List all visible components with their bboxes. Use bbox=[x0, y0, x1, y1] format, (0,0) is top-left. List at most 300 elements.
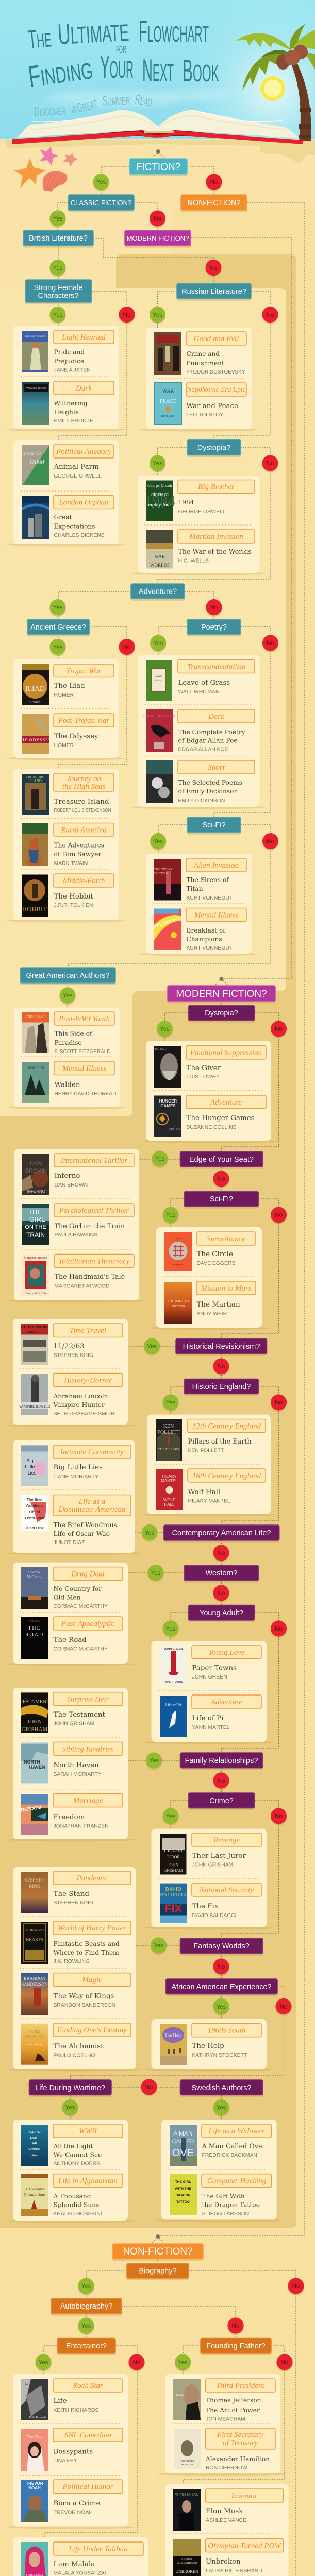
author: JOHN GREEN bbox=[192, 1674, 227, 1680]
tag bbox=[54, 664, 114, 677]
no: No bbox=[145, 2084, 153, 2091]
question: Crime?: Crime? bbox=[209, 1797, 234, 1805]
cover bbox=[22, 774, 49, 815]
cover: THE bbox=[28, 1625, 41, 1631]
tag: Young Love bbox=[209, 1649, 245, 1657]
no bbox=[141, 2079, 157, 2095]
title: War and Peace bbox=[187, 402, 238, 410]
arrow: modern sci-fi branches bbox=[171, 1199, 278, 1338]
title: FINDING bbox=[26, 52, 95, 94]
tag: Emotional Suppression bbox=[190, 1049, 262, 1057]
arrow: russian literature branches bbox=[158, 292, 270, 439]
arrow: dystopia branches bbox=[157, 447, 270, 584]
tag bbox=[53, 1742, 123, 1755]
sky background bbox=[0, 0, 315, 142]
author: CORMAC McCARTHY bbox=[54, 1647, 108, 1652]
cover: ELON MUSK bbox=[174, 2493, 199, 2497]
tag bbox=[192, 2024, 261, 2037]
yes bbox=[150, 635, 166, 651]
tag bbox=[53, 2124, 123, 2138]
no: No bbox=[281, 2360, 288, 2366]
title: The Complete Poetry bbox=[178, 728, 245, 736]
cover bbox=[22, 496, 49, 539]
book: The Circle bbox=[164, 1232, 256, 1271]
cover: FARM bbox=[29, 459, 45, 465]
cover bbox=[160, 1696, 187, 1737]
panel: thriller books bbox=[8, 1149, 145, 1302]
cover bbox=[21, 445, 49, 485]
no: No bbox=[267, 461, 274, 467]
cover bbox=[174, 2429, 201, 2469]
title: Splendid Suns bbox=[54, 2201, 99, 2208]
tag bbox=[186, 858, 246, 872]
cover: HUNGER bbox=[159, 1099, 177, 1104]
question: Swedish Authors?: Swedish Authors? bbox=[191, 2084, 252, 2092]
arrow: founding father branches bbox=[183, 2346, 285, 2484]
title: of Tom Sawyer bbox=[54, 851, 101, 858]
yes bbox=[162, 1808, 179, 1824]
book: The Sirens of Titan bbox=[154, 858, 246, 901]
tag bbox=[178, 530, 255, 543]
cover bbox=[20, 1692, 49, 1733]
cover: Tina Fey bbox=[27, 2435, 42, 2439]
question: Poetry? bbox=[187, 619, 241, 635]
cover: McCarthy bbox=[27, 1574, 42, 1579]
no bbox=[213, 1545, 229, 1561]
yes: Yes bbox=[217, 2004, 226, 2010]
cover bbox=[173, 2489, 201, 2531]
book: Born a Crime bbox=[21, 2480, 123, 2522]
cover bbox=[22, 1154, 49, 1195]
book: The Brief Wondrous Life of Oscar Wao bbox=[21, 1495, 131, 1546]
cover: TREASURE bbox=[26, 775, 44, 779]
author: LAURA HILLENBRAND bbox=[206, 2568, 262, 2574]
cover bbox=[21, 2480, 48, 2522]
yes bbox=[162, 1394, 179, 1411]
title: Life of Pi bbox=[192, 1715, 223, 1722]
tag: Olympian Turned POW bbox=[208, 2542, 281, 2550]
no: No bbox=[275, 1400, 283, 1406]
no bbox=[213, 1585, 229, 1601]
subtitle: SUMMER bbox=[102, 92, 130, 109]
yes: Yes bbox=[96, 179, 106, 185]
panel: swedish authors books bbox=[155, 2120, 284, 2223]
author: HOMER bbox=[54, 743, 74, 749]
arrow: crime branches bbox=[171, 1801, 278, 1938]
author: MARK TWAIN bbox=[54, 861, 88, 867]
book: Freedom bbox=[18, 1794, 123, 1835]
title: of Edgar Allan Poe bbox=[178, 737, 238, 744]
arrow: non-fiction pin bbox=[151, 2234, 164, 2263]
book: Big Little Lies bbox=[21, 1445, 131, 1486]
author: SARAH MORIARTY bbox=[54, 1772, 102, 1777]
yes: Yes bbox=[178, 2360, 188, 2366]
question: Life During Wartime? bbox=[29, 2080, 111, 2095]
question: Modern Fiction? heading: MODERN FICTION? bbox=[176, 989, 267, 999]
panel: historic england books bbox=[142, 1415, 276, 1517]
tag: Time Travel bbox=[70, 1327, 106, 1335]
question: Dystopia?: Dystopia? bbox=[205, 1009, 238, 1018]
cover: THE ODYSSEY bbox=[18, 738, 52, 742]
no bbox=[213, 1772, 229, 1789]
book: Bossypants bbox=[21, 2428, 123, 2471]
cover: SANDERSON bbox=[21, 1981, 48, 1987]
book: Walden bbox=[22, 1061, 117, 1103]
arrow: african american experience bbox=[70, 1987, 284, 2080]
book: Ther Last Juror bbox=[160, 1833, 261, 1874]
question: Fantasy Worlds? bbox=[180, 1938, 263, 1954]
title: Paper Towns bbox=[192, 1665, 237, 1672]
panel: entertainer books bbox=[6, 2374, 135, 2529]
cover: JOHN GREEN bbox=[164, 1648, 183, 1651]
tag: Life as a Widower bbox=[208, 2127, 265, 2136]
tag bbox=[53, 1617, 123, 1630]
cover: Little bbox=[25, 1464, 35, 1469]
cover: FOLLETT bbox=[157, 1430, 180, 1435]
tag: Napoleonic Era Epic bbox=[187, 385, 245, 393]
yes: Yes bbox=[149, 1758, 159, 1764]
book: I am Malala bbox=[21, 2542, 143, 2576]
no: No bbox=[123, 312, 130, 318]
question: Fiction? bbox=[129, 159, 187, 174]
tag bbox=[186, 908, 246, 921]
author: STIEGG LARSSON bbox=[202, 2211, 249, 2217]
title: Unbroken bbox=[206, 2558, 241, 2566]
cover bbox=[146, 530, 173, 569]
cover bbox=[21, 2379, 48, 2420]
book: Abraham Lincoln: Vampire Hunter bbox=[19, 1374, 123, 1417]
cover bbox=[160, 2024, 187, 2065]
title: FLOWCHART bbox=[139, 15, 209, 48]
yes: Yes bbox=[65, 2105, 75, 2111]
question: Adventure?: Adventure? bbox=[139, 587, 177, 596]
tag: Inventor bbox=[231, 2492, 258, 2500]
no bbox=[262, 833, 278, 849]
tag: Drug Deal bbox=[71, 1570, 105, 1579]
tag: Alien Invasion bbox=[193, 861, 239, 870]
tag: Dominican-American bbox=[58, 1505, 125, 1514]
cover: WITH THE bbox=[175, 2187, 191, 2191]
title: The Brief Wondrous bbox=[54, 1521, 117, 1529]
book: Unbroken bbox=[173, 2539, 284, 2576]
yes: Yes bbox=[155, 1156, 165, 1162]
cover: ILIAD bbox=[25, 685, 45, 693]
title: NEXT bbox=[142, 53, 174, 88]
question: Historic England? bbox=[184, 1379, 259, 1394]
cover: GAMES bbox=[160, 1104, 176, 1108]
question: British Literature? bbox=[23, 230, 93, 246]
panel: great american books bbox=[7, 1008, 126, 1110]
question: Contemporary American Life?: Contemporary American Life? bbox=[172, 1529, 271, 1537]
cover: Big bbox=[26, 1458, 34, 1463]
cover bbox=[164, 1232, 192, 1271]
book: Pride and Prejudice bbox=[22, 330, 114, 373]
yes bbox=[49, 210, 66, 227]
tag bbox=[53, 1973, 131, 1987]
author: J.R.R. TOLKIEN bbox=[54, 903, 93, 908]
cover: KEN bbox=[163, 1423, 174, 1429]
tag bbox=[192, 1695, 261, 1708]
yes bbox=[152, 1150, 168, 1167]
tag: Dark bbox=[75, 384, 92, 393]
arrow: sci-fi branches bbox=[68, 825, 270, 968]
tag: Rock Star bbox=[72, 2382, 103, 2390]
tag: Life as a bbox=[79, 1498, 105, 1506]
author: TREVOR NOAH bbox=[54, 2510, 93, 2516]
author: ANTHONY DOERR bbox=[54, 2161, 101, 2167]
book: This Side of Paradise bbox=[22, 1012, 114, 1055]
cover: CIRCLE bbox=[174, 1237, 183, 1240]
tag: Political Allegory bbox=[56, 448, 111, 456]
tag: the High Seas bbox=[62, 783, 105, 791]
no: No bbox=[275, 1212, 283, 1218]
cover: Life of Pi bbox=[165, 1703, 181, 1707]
cover bbox=[18, 1794, 48, 1835]
no bbox=[119, 307, 135, 323]
title: Champions bbox=[187, 936, 222, 943]
title: Animal Farm bbox=[54, 463, 99, 471]
cover: Wuthering Heights bbox=[26, 387, 46, 390]
yes bbox=[78, 2278, 94, 2294]
title: The Testament bbox=[54, 1711, 106, 1719]
title: The Martian bbox=[197, 1301, 240, 1309]
title: The Way of Kings bbox=[54, 1993, 114, 2000]
cover: DAN bbox=[30, 1161, 42, 1167]
tag bbox=[202, 2124, 271, 2138]
author: PAULO COELHO bbox=[54, 2053, 95, 2059]
title: A Thousand bbox=[54, 2193, 91, 2200]
arrow: entertainer branches bbox=[44, 2346, 137, 2537]
book: The Alchemist bbox=[21, 2023, 131, 2065]
cover bbox=[21, 1567, 48, 1609]
cover bbox=[21, 2174, 48, 2216]
cover bbox=[143, 709, 176, 752]
title: Pride and bbox=[54, 348, 85, 355]
no: No bbox=[210, 265, 217, 272]
cover: Lies bbox=[28, 1470, 37, 1476]
yes: Yes bbox=[153, 461, 162, 467]
cover: PAULO bbox=[28, 2030, 41, 2034]
cover bbox=[19, 1374, 51, 1415]
title: THE bbox=[27, 23, 53, 54]
tag: First Secretary bbox=[217, 2431, 263, 2439]
title: A Man Called Ove bbox=[201, 2143, 262, 2150]
arrow: edge of your seat bbox=[140, 1159, 222, 1191]
title: Titan bbox=[187, 885, 203, 892]
tag: Pandemic bbox=[76, 1874, 108, 1883]
question: Ancient Greece? bbox=[27, 619, 89, 635]
question: Edge of Your Seat? bbox=[180, 1151, 263, 1167]
title: The Selected Poems bbox=[178, 779, 242, 786]
panel: family relationships books bbox=[6, 1688, 135, 1841]
cover: Oscar Wao bbox=[25, 1516, 44, 1520]
tag bbox=[54, 773, 114, 791]
cover bbox=[164, 1282, 192, 1324]
book: The Fix bbox=[160, 1883, 261, 1923]
title: The Sirens of bbox=[187, 876, 229, 884]
yes: Yes bbox=[217, 2105, 226, 2111]
tag: SNL Comedian bbox=[64, 2431, 111, 2439]
tag bbox=[53, 2174, 123, 2188]
title: Walden bbox=[55, 1081, 80, 1089]
question: Classic Fiction? bbox=[68, 195, 134, 210]
cover bbox=[154, 859, 181, 901]
cover: Life of bbox=[29, 1510, 40, 1514]
tag bbox=[192, 1833, 261, 1846]
no: No bbox=[210, 605, 218, 611]
author: MARGARET ATWOOD bbox=[55, 1284, 109, 1289]
cover bbox=[18, 714, 52, 754]
tag: International Thriller bbox=[60, 1157, 127, 1165]
author: FREDRICK BACKMAN bbox=[202, 2153, 257, 2158]
panel: ancient greece books bbox=[7, 659, 126, 760]
title: Heights bbox=[54, 409, 79, 416]
book: Breakfast of Champions bbox=[153, 908, 246, 951]
author: GEORGE ORWELL bbox=[178, 509, 226, 515]
book: 1984 bbox=[144, 480, 255, 521]
yes: Yes bbox=[63, 993, 73, 999]
question: Edge of Your Seat?: Edge of Your Seat? bbox=[189, 1156, 254, 1164]
yes bbox=[157, 1021, 173, 1037]
author: ASHLEE VANCE bbox=[206, 2518, 246, 2523]
question: Russian Literature?: Russian Literature? bbox=[181, 287, 246, 296]
no bbox=[288, 2278, 304, 2294]
question: Sci-Fi? (modern): Sci-Fi? bbox=[210, 1195, 233, 1204]
cover: OVE bbox=[172, 2147, 194, 2159]
cover: COLLINS bbox=[169, 1128, 180, 1131]
tag: Post-Trojan War bbox=[58, 717, 109, 725]
question: Entertainer? bbox=[57, 2338, 115, 2353]
cover bbox=[22, 875, 48, 917]
no bbox=[262, 307, 278, 323]
book: The Odyssey bbox=[18, 714, 114, 754]
author: KEITH RICHARDS bbox=[54, 2408, 98, 2413]
question: Classic Fiction?: CLASSIC FICTION? bbox=[71, 199, 131, 207]
title: Leave of Grass bbox=[178, 679, 230, 687]
title: BOOK bbox=[183, 54, 219, 88]
cover: The Brief bbox=[27, 1497, 43, 1502]
cover: THE SIRENS bbox=[154, 868, 172, 871]
title: The Art of Power bbox=[206, 2406, 260, 2414]
no bbox=[262, 635, 278, 651]
title: The Giver bbox=[187, 1064, 221, 1072]
yes: Yes bbox=[53, 265, 63, 272]
tag bbox=[178, 709, 255, 723]
tag bbox=[54, 874, 114, 887]
tag: Journey on bbox=[67, 775, 101, 783]
question: Young Adult?: Young Adult? bbox=[200, 1609, 243, 1617]
cover: SEE bbox=[31, 2154, 38, 2157]
tag bbox=[206, 2539, 284, 2552]
cover: COELHO bbox=[25, 2034, 44, 2039]
yes: Yes bbox=[166, 1814, 176, 1820]
panel: inventor and POW books bbox=[160, 2484, 294, 2576]
no: No bbox=[267, 640, 274, 647]
question: Autobiography?: Autobiography? bbox=[60, 2302, 112, 2311]
yes bbox=[49, 260, 66, 276]
book: Treasure Island bbox=[22, 773, 114, 815]
author: LIANE MORIARTY bbox=[54, 1474, 98, 1480]
cover bbox=[21, 2542, 48, 2576]
tag bbox=[53, 1445, 131, 1459]
tag bbox=[178, 760, 255, 774]
panel: crime books bbox=[144, 1829, 273, 1930]
title: The Girl With bbox=[202, 2193, 245, 2200]
question: Non-Fiction? heading bbox=[112, 2244, 203, 2259]
cover bbox=[22, 1062, 49, 1103]
tag bbox=[178, 480, 255, 494]
author: GEORGE ORWELL bbox=[54, 473, 102, 479]
tag: Totalitarian Theocracy bbox=[58, 1257, 130, 1265]
question: Strong Female Characters? bbox=[25, 280, 92, 302]
cover: HILARY bbox=[162, 1474, 177, 1479]
book: A Thousand Splendid Suns bbox=[21, 2174, 123, 2217]
tag: Mission to Mars bbox=[200, 1284, 252, 1293]
author: DAVE EGGERS bbox=[197, 1261, 235, 1266]
cover: STEPHEN bbox=[24, 1877, 45, 1883]
arrow: strong female branches bbox=[58, 292, 127, 440]
cover: Junot Diaz bbox=[25, 1526, 44, 1530]
cover: BREAKFAST bbox=[153, 916, 180, 929]
arrow: start pin bbox=[151, 149, 165, 159]
author: SETH GRAHAME-SMITH bbox=[54, 1411, 114, 1417]
no bbox=[150, 210, 165, 227]
panel: poetry books bbox=[131, 655, 266, 809]
yes bbox=[150, 455, 165, 471]
subtitle: GREAT bbox=[75, 95, 99, 116]
book: The Testament bbox=[20, 1692, 123, 1733]
icon: palm tree bbox=[236, 24, 315, 141]
cover bbox=[160, 1834, 187, 1874]
question: Biography?: Biography? bbox=[139, 2267, 177, 2275]
question: Poetry?: Poetry? bbox=[201, 623, 227, 632]
tag bbox=[54, 330, 114, 344]
cover: DRAGON bbox=[176, 2194, 191, 2197]
question: Great American Authors? bbox=[20, 968, 115, 983]
panel: young adult books bbox=[144, 1641, 273, 1744]
tag bbox=[53, 2023, 131, 2037]
panel: sci-fi books bbox=[139, 854, 258, 956]
tag: Political Humor bbox=[62, 2483, 113, 2491]
no: No bbox=[218, 1590, 225, 1597]
author: JON MEACHAM bbox=[206, 2416, 245, 2422]
tag bbox=[54, 1154, 134, 1167]
tag: WWII bbox=[79, 2127, 97, 2136]
yes: Yes bbox=[166, 1400, 176, 1406]
question: Historical Revisionism?: Historical Revisionism? bbox=[183, 1343, 260, 1351]
panel: fantasy books bbox=[7, 1867, 141, 2071]
yes: Yes bbox=[153, 839, 163, 845]
cover bbox=[154, 1046, 181, 1088]
title: Freedom bbox=[54, 1814, 85, 1821]
cover: FIX bbox=[164, 1902, 182, 1915]
title: The Circle bbox=[197, 1250, 233, 1258]
no: No bbox=[275, 1626, 283, 1632]
title: All the Light bbox=[54, 2143, 93, 2150]
tag: Transcendentalism bbox=[187, 663, 245, 671]
title: The Road bbox=[54, 1636, 87, 1644]
arrow: classic fiction branches bbox=[58, 202, 157, 230]
book: Wolf Hall bbox=[156, 1469, 266, 1510]
arrow: young adult branches bbox=[171, 1613, 278, 1753]
title: The Hunger Games bbox=[187, 1114, 255, 1122]
question: Western? bbox=[184, 1565, 259, 1581]
tag bbox=[186, 1046, 266, 1059]
cover: WAR bbox=[155, 554, 165, 560]
no bbox=[213, 1358, 229, 1375]
panel: founding father books bbox=[158, 2374, 287, 2476]
book: Crime and Punishment bbox=[154, 332, 246, 375]
